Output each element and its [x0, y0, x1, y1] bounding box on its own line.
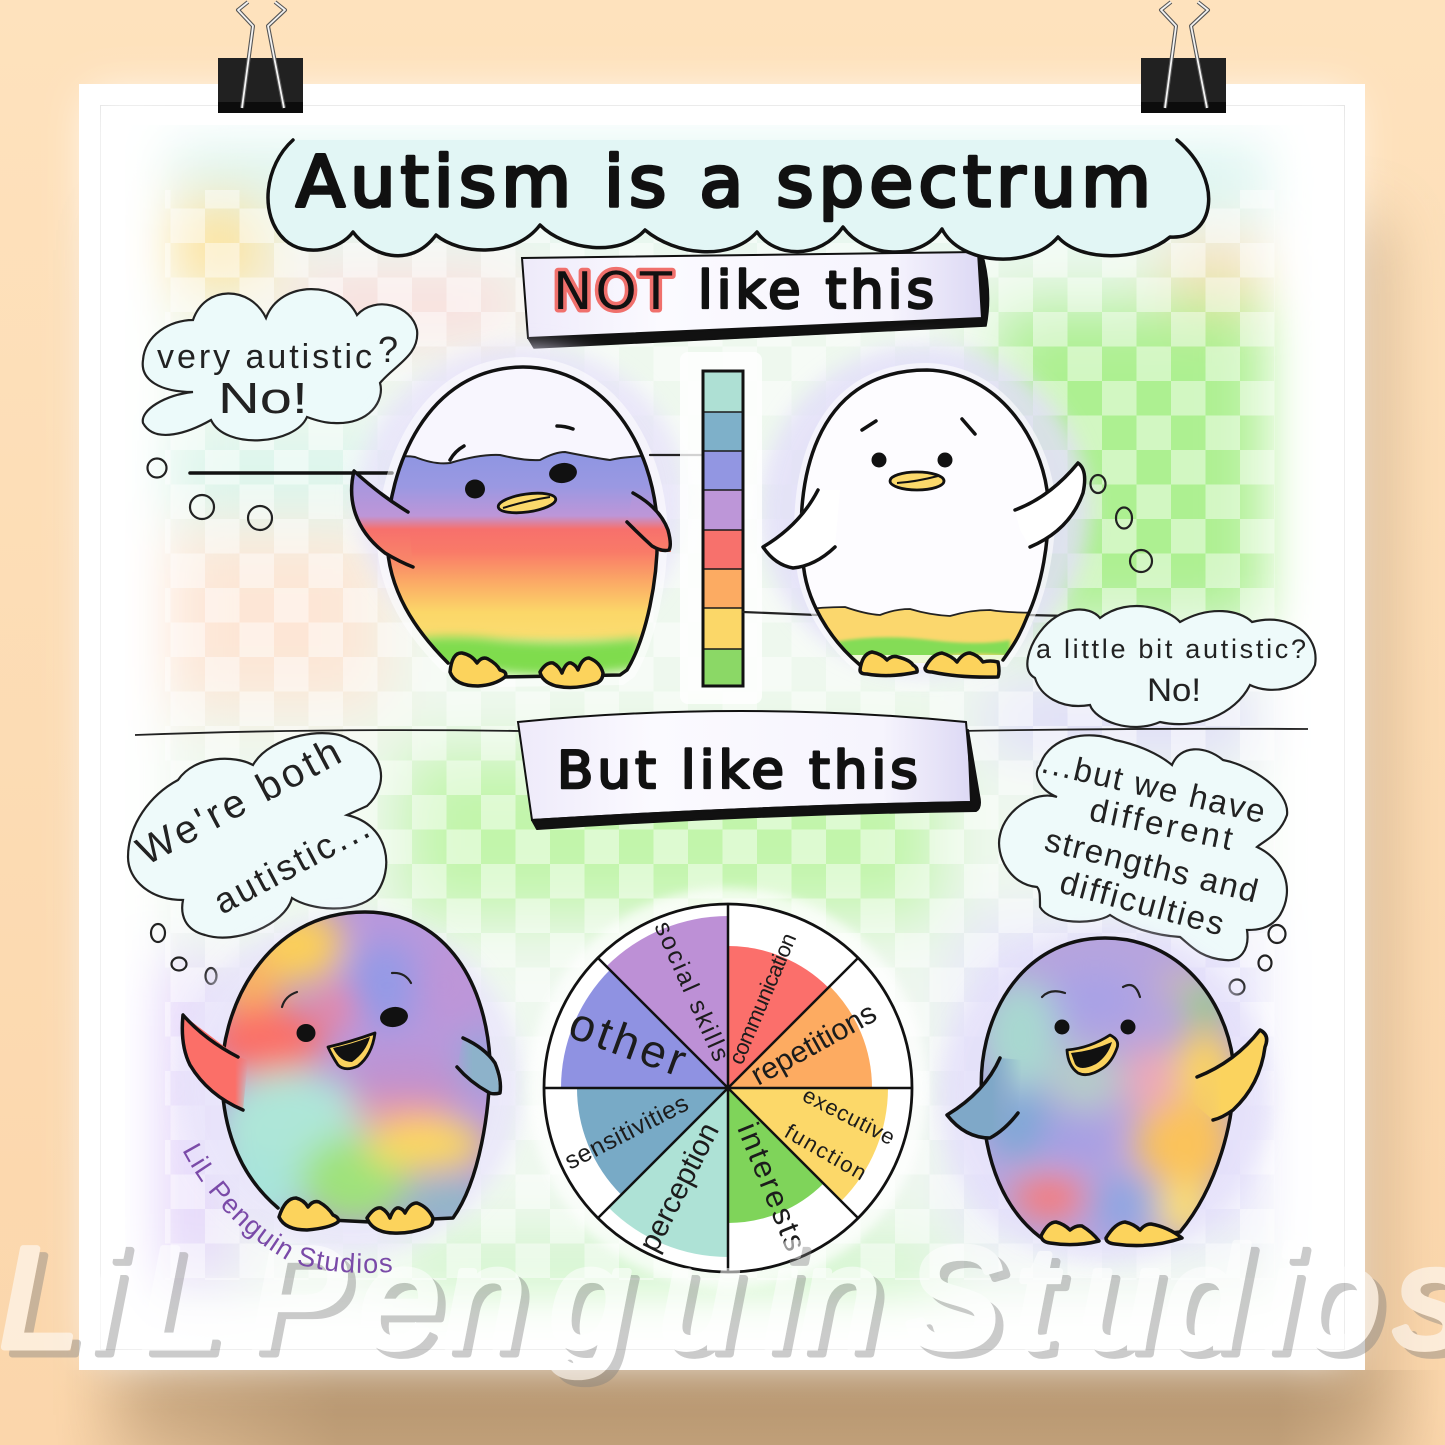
pie wheel: [528, 888, 928, 1288]
glows behind lower penguins: [178, 915, 522, 1255]
binder clip: right: [1141, 2, 1226, 113]
speech text: [1038, 743, 1269, 942]
thought cloud: very autistic: ?: [378, 329, 398, 370]
poster shadow: bottom strip: [60, 1370, 1445, 1445]
penguin: very autistic: [352, 360, 675, 690]
thought cloud: different strengths: [999, 735, 1287, 994]
penguin: a little bit autistic: [763, 365, 1152, 690]
a little bit autistic text: a little bit autistic?: [1036, 634, 1306, 664]
thought cloud: very autistic: [143, 289, 417, 530]
like this: like this: [698, 261, 938, 321]
signature: LiL Penguin Studios: [183, 1143, 392, 1274]
spectrum bar: [680, 352, 762, 704]
banner: But like this: [518, 711, 980, 829]
wheel labels: sensitivities: [560, 1089, 693, 1175]
thought cloud: We're both autistic: [128, 730, 386, 984]
autistic text: autistic...: [207, 806, 376, 922]
wheel labels: social skills: [649, 917, 735, 1065]
thought cloud: a little bit autistic: [1027, 606, 1316, 727]
poster shadow: [120, 220, 1385, 1445]
line: bar to left penguin: [650, 454, 703, 456]
title cloud: [268, 140, 1209, 259]
wheel labels: [560, 917, 899, 1257]
lines: bar to right penguin: [743, 612, 1070, 616]
very autistic text: very autistic: [157, 338, 372, 376]
sectors: [561, 916, 888, 1257]
speech text: ...but we have: [1038, 743, 1269, 830]
wheel labels: function: [780, 1119, 871, 1185]
speech text: different: [1087, 791, 1236, 857]
binder clip: left: [218, 2, 303, 113]
But like this text: But like this: [557, 741, 922, 801]
poster sheet: [79, 84, 1365, 1370]
title text: Autism is a spectrum: [296, 141, 1156, 223]
banner: NOT like this: [522, 252, 989, 348]
watermark: LiL Penguin Studios: [0, 1219, 1445, 1378]
We're both text: We're both: [130, 730, 348, 874]
glow behind top left penguin: [357, 345, 687, 655]
wheel labels: communication: [724, 929, 801, 1068]
wheel labels: repetitions: [745, 996, 882, 1092]
wheel labels: executive: [799, 1082, 899, 1150]
NOT highlighted red: NOT: [553, 262, 675, 322]
speech text: strengths and: [1041, 821, 1262, 910]
white edge fade: [90, 95, 1350, 1360]
speech text: difficulties: [1056, 863, 1228, 942]
line: very autistic pointer: [190, 471, 392, 475]
glow behind top right penguin: [760, 345, 1090, 675]
wheel labels: other: [563, 997, 693, 1086]
wheel labels: perception: [633, 1117, 726, 1257]
pastel checkered background: [150, 130, 1275, 1300]
thought cloud: a little bit autistic: No!: [1147, 672, 1201, 708]
watermark: LiL Penguin Studios: [8, 1226, 1445, 1385]
penguin: lower left rainbow: [182, 905, 500, 1233]
wheel labels: interests: [731, 1118, 814, 1256]
divider line: [135, 729, 1308, 735]
penguin: lower right rainbow: [947, 930, 1267, 1250]
thought cloud: very autistic: No!: [218, 374, 308, 423]
